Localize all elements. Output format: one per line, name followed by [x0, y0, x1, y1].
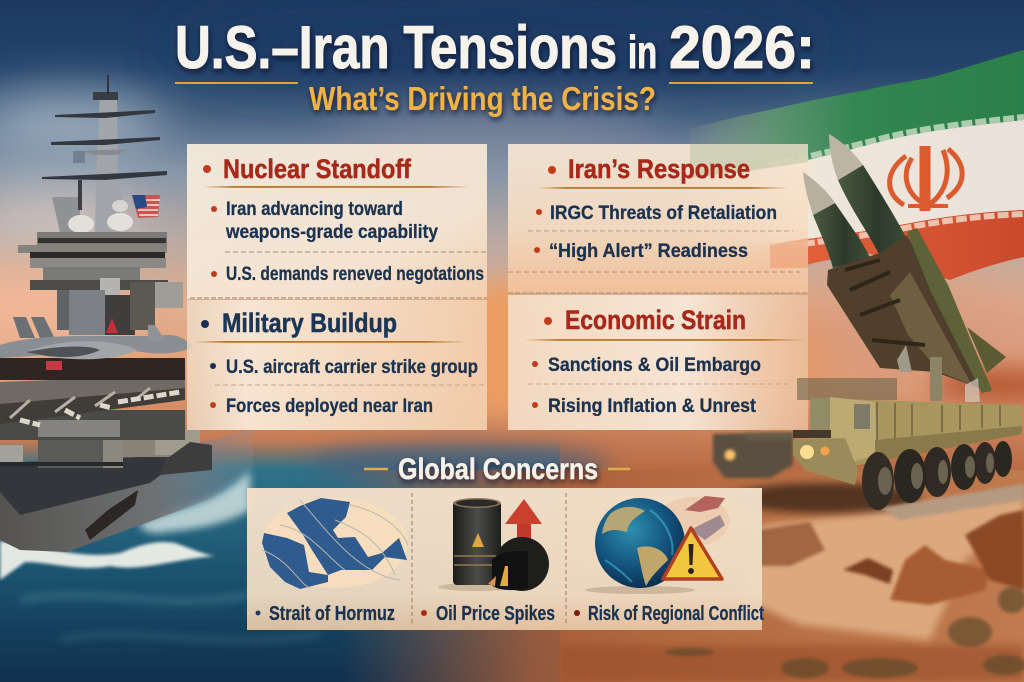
- hull side: [0, 428, 253, 552]
- flag emblem: [890, 146, 962, 211]
- parked jets: [0, 317, 193, 359]
- panel: economic strain: [508, 295, 808, 430]
- title line: in: [628, 26, 657, 78]
- truck body: [810, 398, 1022, 470]
- panel: iran's response: “High Alert” Readiness: [549, 241, 748, 262]
- panel: military buildup: U.S. aircraft carrier strike group: [226, 357, 478, 378]
- flight deck and trusses: [0, 375, 185, 404]
- panel: military buildup: Forces deployed near Iran: [226, 396, 433, 417]
- ocean: [0, 440, 560, 682]
- side structure: [120, 417, 180, 457]
- title line: U.S.–Iran Tensions: [175, 14, 617, 81]
- rear structure: [797, 378, 897, 400]
- panel: nuclear standoff: [187, 144, 487, 299]
- icon: strait of hormuz map: [262, 498, 408, 589]
- heading: military buildup: Military Buildup: [222, 308, 397, 338]
- panel: nuclear standoff: U.S. demands reneved negotations: [226, 264, 484, 285]
- island tower: [18, 75, 183, 335]
- crowd on deck: [0, 358, 185, 380]
- launcher frame: [827, 235, 990, 392]
- icon: globe and warning sign: [585, 496, 730, 594]
- label: risk of regional conflict: [574, 602, 764, 625]
- missiles: [803, 134, 910, 268]
- heading: global concerns: Global Concerns: [398, 453, 598, 486]
- title line: 2026:: [669, 14, 815, 81]
- missile launcher: [713, 134, 1022, 510]
- panel: military buildup: [187, 300, 487, 430]
- overhang: [0, 455, 187, 515]
- label: strait of hormuz: Strait of Hormuz: [269, 602, 395, 625]
- desert ground: [340, 470, 1024, 682]
- panel: economic strain: Rising Inflation & Unrest: [548, 396, 757, 417]
- panel: nuclear standoff: Iran advancing toward: [226, 199, 403, 220]
- waves: [0, 541, 215, 580]
- panel: global concerns: [247, 488, 764, 630]
- iranian flag: [690, 50, 1024, 280]
- subtitle: What’s Driving the Crisis?: [309, 80, 656, 117]
- panel: iran's response: IRGC Threats of Retaliation: [550, 203, 777, 224]
- label: oil price spikes: Oil Price Spikes: [436, 602, 555, 625]
- label: risk of regional conflict: Risk of Regional Conflict: [588, 602, 764, 625]
- aircraft carrier: [0, 75, 253, 552]
- panel: iran's response: [508, 144, 808, 293]
- panel: nuclear standoff: weapons-grade capability: [225, 222, 438, 243]
- second truck: [713, 432, 793, 478]
- heading: economic strain: Economic Strain: [565, 305, 746, 335]
- panel: economic strain: Sanctions & Oil Embargo: [548, 355, 761, 376]
- truck wheels: [862, 441, 1012, 510]
- icon: oil barrel and rising arrow: [438, 498, 549, 591]
- heading: nuclear standoff: Nuclear Standoff: [223, 154, 411, 184]
- heading: iran's response: Iran’s Response: [568, 154, 750, 184]
- us flag on mast: [132, 195, 160, 218]
- title: [175, 14, 815, 117]
